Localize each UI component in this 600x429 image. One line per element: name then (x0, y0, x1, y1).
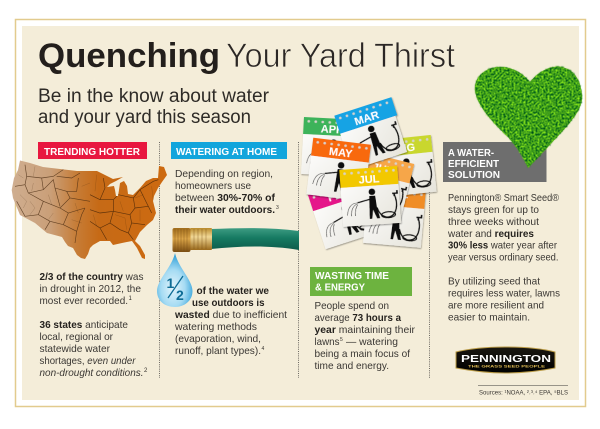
text: smart seed description: Pennington® Smart Seed® (448, 192, 559, 204)
text: drought statistics: 1 (128, 296, 132, 302)
heading: wasting time and energy: & ENERGY (315, 282, 365, 294)
calendar: March: MAR (353, 109, 381, 128)
heading: trending hotter: TRENDING HOTTER (44, 146, 140, 158)
panel: watering at home (157, 142, 299, 357)
sources (478, 386, 569, 396)
panel: wasting time and energy (301, 97, 437, 372)
calendar: May: MAY (328, 146, 354, 161)
text: lawn maintenance hours: 5 (340, 337, 343, 343)
cracks: west (15, 165, 90, 243)
text: outdoor water use: 3 (276, 205, 279, 211)
text: water wasted: (evaporation, wind, (175, 333, 261, 345)
calendar: April (301, 117, 362, 177)
calendar: May (306, 138, 371, 201)
calendar: April: APR (320, 123, 344, 137)
text: water wasted: use outdoors is (192, 297, 265, 309)
panel: trending hotter (12, 142, 167, 379)
text: water wasted: 4 (262, 346, 264, 352)
text: water wasted (174, 285, 287, 357)
heading: a water-efficient solution: SOLUTION (448, 169, 500, 181)
text: outdoor water use: homeowners use (175, 180, 251, 192)
text: water wasted: watering methods (174, 321, 257, 333)
heading: a water-efficient solution: EFFICIENT (448, 158, 500, 170)
heading: a water-efficient solution: A WATER- (448, 147, 494, 159)
heading: wasting time and energy: WASTING TIME (315, 270, 389, 282)
calendar: October (363, 186, 426, 248)
text: lawn maintenance hours: time and energy. (314, 360, 389, 372)
icon: garden hose (172, 228, 299, 252)
text: lawn maintenance hours: year maintaining their (314, 324, 415, 336)
heading: watering at home (171, 142, 287, 159)
text: smart seed description: are more resilient and (448, 300, 544, 312)
text: lawn maintenance hours: being a main focus of (314, 348, 410, 360)
icon: water drop with one half: 1 (166, 275, 174, 291)
text: outdoor water use (175, 168, 279, 216)
calendar: August: AUG (390, 142, 416, 156)
text: smart seed description: three weeks without (448, 216, 539, 228)
text: smart seed description: year versus ordinary seed. (448, 252, 558, 264)
text: water wasted: of the water we (196, 285, 269, 297)
text: smart seed description: easier to maintain. (448, 312, 530, 324)
text: smart seed description: 30% less water year after (448, 240, 557, 252)
text: outdoor water use: Depending on region, (175, 168, 273, 180)
calendar: August (373, 135, 437, 198)
calendar: July: JUL (358, 173, 380, 187)
title (38, 37, 456, 75)
logo: Pennington: THE GRASS SEED PEOPLE (468, 364, 545, 368)
text: drought statistics: non-drought conditions. (40, 367, 144, 379)
text: drought statistics: most ever recorded. (40, 295, 128, 307)
icon: water drop with one half (157, 253, 192, 307)
text: lawn maintenance hours: — watering (346, 336, 398, 348)
calendar: July (339, 166, 401, 227)
text: smart seed description (447, 192, 560, 324)
text: drought statistics: shortages, even under (40, 355, 136, 367)
text: smart seed description: requires less water, lawns (448, 288, 560, 300)
icon: stack of calendars (301, 97, 437, 249)
logo: Pennington: PENNINGTON (461, 354, 551, 365)
calendar: March (334, 97, 409, 170)
text: water wasted: wasted due to inefficient (174, 309, 287, 321)
panel: a water-efficient solution (443, 67, 582, 396)
subtitle: Be in the know about water (38, 86, 270, 107)
text: drought statistics: in drought in 2012, the (40, 283, 141, 295)
text: lawn maintenance hours: People spend on (314, 300, 389, 312)
calendar: February (308, 177, 381, 249)
calendar: June (344, 150, 414, 219)
logo: Pennington (456, 347, 555, 373)
cracks: east (90, 175, 158, 240)
dotted column dividers (160, 142, 430, 378)
text: drought statistics: statewide water (40, 343, 110, 355)
sources: Sources: ¹NOAA, ²˒³˒⁴ EPA, ⁵BLS (479, 390, 569, 396)
calendar: October: OCT (384, 193, 408, 207)
calendar: June: JUN (371, 161, 395, 178)
icon: grass heart (475, 67, 582, 168)
text: drought statistics: local, regional or (40, 331, 113, 343)
heading: wasting time and energy (310, 267, 412, 296)
text: smart seed description: By utilizing seed that (448, 276, 540, 288)
text: smart seed description: stays green for up to (448, 204, 539, 216)
text: outdoor water use: between 30%-70% of (175, 192, 275, 204)
text: drought statistics: 2 (144, 368, 148, 374)
heading: trending hotter (38, 142, 147, 159)
text: lawn maintenance hours (314, 300, 415, 372)
text: drought statistics (40, 271, 148, 379)
text: drought statistics: 2/3 of the country was (40, 271, 144, 283)
calendar: February: FEB (326, 186, 351, 205)
subtitle (38, 86, 270, 128)
text: drought statistics: 36 states anticipate (40, 319, 128, 331)
heading: watering at home: WATERING AT HOME (176, 146, 277, 158)
title: Quenching (38, 37, 220, 75)
text: outdoor water use: their water outdoors. (175, 204, 275, 216)
text: water wasted: runoff, plant types). (175, 345, 261, 357)
subtitle: and your yard this season (38, 107, 251, 128)
icon: water drop with one half: 2 (176, 287, 184, 303)
text: lawn maintenance hours: average 73 hours a (314, 312, 401, 324)
title: Your Yard Thirst (226, 37, 456, 75)
heading: a water-efficient solution (443, 142, 546, 182)
map: cracked earth United States (12, 160, 167, 259)
text: smart seed description: water and requires (447, 228, 534, 240)
text: lawn maintenance hours: lawns (314, 336, 340, 348)
